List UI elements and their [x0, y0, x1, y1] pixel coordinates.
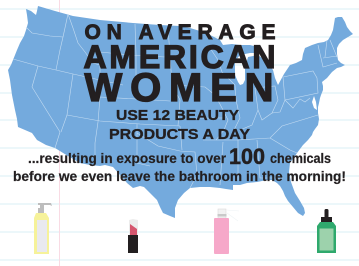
map: United States [8, 6, 353, 218]
icon: spray bottle [214, 209, 239, 254]
text block: exposure to chemicals [13, 144, 346, 184]
title: On average American women: WOMEN [84, 66, 274, 110]
subheading: use 12 beauty products a day [109, 107, 250, 143]
title: On average American women: AMERICAN [84, 39, 276, 75]
text block: exposure to chemicals: ...resulting in exposure to over [28, 150, 227, 166]
text block: exposure to chemicals: before we even leave the bathroom in the morning! [13, 168, 346, 184]
subheading: use 12 beauty products a day: PRODUCTS A DAY [109, 126, 250, 143]
title: On average American women: ON AVERAGE [84, 21, 276, 44]
state borders [13, 14, 337, 188]
subheading: use 12 beauty products a day: USE 12 BEAUTY [116, 107, 239, 124]
title: On average American women [84, 21, 276, 110]
text block: exposure to chemicals: 100 [229, 144, 265, 169]
icon: lipstick [128, 219, 138, 253]
text block: exposure to chemicals: chemicals [270, 150, 331, 166]
icon: pump bottle [34, 203, 52, 254]
icon: dropper bottle [317, 209, 336, 253]
